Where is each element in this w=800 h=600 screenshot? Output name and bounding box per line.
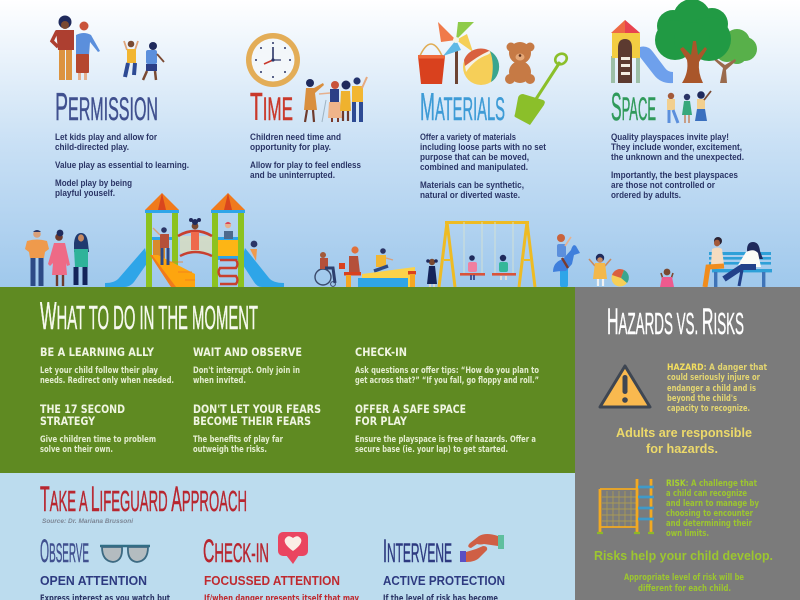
- text: permission body: Model play by being: [55, 178, 132, 188]
- panel: what to do in the moment: [40, 295, 539, 455]
- text: appropriate level of risk: Appropriate level of risk will be: [624, 573, 744, 583]
- text: risk definition: a child can recognize: [666, 489, 747, 499]
- heading: Check-in: CHECK-IN: [203, 533, 269, 569]
- text: materials body: [420, 132, 546, 200]
- tip: don't let your fears: [193, 402, 321, 455]
- text: permission body: [55, 132, 189, 198]
- heading: Take a Lifeguard Approach: TAKE A LIFEGUARD APPROACH: [40, 480, 247, 519]
- subheading: focussed attention: FOCUSSED ATTENTION: [204, 573, 340, 588]
- heading: Time: TIME: [250, 86, 293, 129]
- text: materials body: Materials can be synthetic,: [420, 180, 524, 190]
- column: intervene: [383, 533, 505, 600]
- tip: be a learning ally: Let your child follow their play: [40, 366, 158, 376]
- callout: adults are responsible: Adults are responsible: [616, 425, 752, 440]
- sky background: [0, 0, 800, 288]
- tip: the 17 second strategy: solve on their own.: [40, 445, 113, 455]
- tip: don't let your fears: outweigh the risks.: [193, 445, 267, 455]
- text: risk definition: [666, 479, 759, 539]
- heading: Materials: MATERIALS: [420, 86, 505, 129]
- column: observe: OBSERVE: [40, 533, 89, 569]
- text: risk definition: own limits.: [666, 529, 709, 539]
- icon: group of children: [304, 77, 367, 122]
- text: permission body: Let kids play and allow for: [55, 132, 158, 142]
- text: hazard definition: endanger a child and is: [667, 384, 756, 394]
- icon: climbing net: [597, 479, 654, 533]
- text: hazard definition: capacity to recognize.: [667, 404, 750, 414]
- illustration: girl by swing: [426, 259, 438, 287]
- icon: hands: [460, 534, 504, 562]
- callout: adults are responsible: for hazards.: [646, 441, 718, 456]
- text: appropriate level of risk: different for each child.: [638, 584, 731, 594]
- tip: be a learning ally: [40, 345, 174, 386]
- tip: don't let your fears: BECOME THEIR FEARS: [193, 414, 311, 428]
- illustration: adults on bench: [702, 237, 772, 289]
- text: hazard definition: [667, 363, 767, 414]
- icon: shovel: [514, 52, 569, 125]
- text: appropriate level of risk: [624, 573, 744, 594]
- illustration: three adults: [25, 230, 89, 286]
- text: materials body: natural or diverted waste.: [420, 190, 520, 200]
- heading: Permission: PERMISSION: [55, 86, 158, 129]
- tip: offer a safe space: FOR PLAY: [355, 414, 407, 428]
- tip: offer a safe space: secure base (ie. your lap) to get started.: [355, 445, 508, 455]
- text: hazard definition: HAZARD: A danger that: [667, 363, 767, 373]
- illustration: wheelchair user, adult and sandbox: [315, 246, 416, 287]
- tip: wait and observe: [193, 345, 302, 386]
- text: risk definition: and learn to manage by: [666, 499, 759, 509]
- text: materials body: including loose parts with no set: [420, 142, 546, 152]
- column: intervene: INTERVENE: [383, 533, 452, 569]
- panel: permission: [52, 16, 189, 198]
- illustration: toddler with ball: [589, 254, 629, 286]
- text: space body: Importantly, the best playspaces: [611, 170, 738, 180]
- tip: the 17 second strategy: Give children time to problem: [40, 435, 156, 445]
- panel: time: [246, 33, 367, 180]
- text: space body: They include wonder, excitement,: [611, 142, 742, 152]
- text: time body: and be uninterrupted.: [250, 170, 335, 180]
- text: risk definition: choosing to encounter: [666, 509, 754, 519]
- panel: space: [611, 0, 757, 200]
- subheading: open attention: OPEN ATTENTION: [40, 573, 147, 588]
- callout: adults are responsible: [616, 425, 752, 456]
- panel: materials: [418, 22, 569, 200]
- text: hazard definition: could seriously injure or: [667, 373, 761, 383]
- tip: offer a safe space: [355, 402, 536, 455]
- icon: heart speech bubble: [278, 532, 308, 564]
- panel: lifeguard approach: [0, 473, 575, 600]
- tip: the 17 second strategy: THE 17 SECOND: [40, 402, 125, 416]
- tip: the 17 second strategy: [40, 402, 156, 455]
- column: observe: [40, 533, 170, 600]
- icon: play tower with slide: [611, 20, 673, 83]
- icon: beach ball: [463, 48, 499, 85]
- panel: what to do in the moment: WHAT TO DO IN THE MOMENT: [40, 295, 258, 338]
- tip: wait and observe: Don't interrupt. Only join in: [193, 366, 300, 376]
- text: permission body: child-directed play.: [55, 142, 129, 152]
- text: risk definition: RISK: A challenge that: [666, 479, 757, 489]
- illustration: swing set: [439, 221, 535, 287]
- tip: wait and observe: when invited.: [193, 376, 246, 386]
- text: time body: opportunity for play.: [250, 142, 331, 152]
- text: materials body: Offer a variety of materials: [420, 132, 516, 142]
- text: time body: [250, 132, 361, 180]
- icon: trees: [655, 0, 757, 83]
- text: materials body: purpose that can be moved,: [420, 152, 529, 162]
- text: space body: Quality playspaces invite play!: [611, 132, 729, 142]
- icon: teddy bear: [505, 42, 535, 84]
- ground: grass: [0, 287, 575, 473]
- tip: be a learning ally: BE A LEARNING ALLY: [40, 345, 155, 359]
- illustration: baby: [660, 269, 674, 287]
- icon: bucket: [418, 44, 445, 84]
- text: materials body: combined and manipulated.: [420, 162, 528, 172]
- icon: clock: [246, 33, 300, 87]
- text: space body: ordered by adults.: [611, 190, 681, 200]
- tip: the 17 second strategy: STRATEGY: [40, 414, 95, 428]
- panel: space: SPACE: [611, 86, 656, 129]
- tip: wait and observe: WAIT AND OBSERVE: [193, 345, 302, 359]
- tip: check-in: CHECK-IN: [355, 345, 407, 359]
- source note: Source: Dr. Mariana Brussoni: [42, 518, 133, 525]
- text: space body: [611, 132, 744, 200]
- icon: pinwheel: [438, 22, 474, 84]
- text: risk definition: and determining their: [666, 519, 753, 529]
- icon: glasses: [100, 546, 150, 562]
- heading: Hazards vs. Risks: HAZARDS VS. RISKS: [607, 301, 744, 342]
- tip: check-in: get across that?” “If you fall, go floppy and roll.”: [355, 376, 539, 386]
- tip: offer a safe space: Ensure the playspace is free of hazards. Offer a: [355, 435, 536, 445]
- tip: check-in: Ask questions or offer tips: “How do you plan to: [355, 366, 539, 376]
- icon: warning triangle: [600, 366, 650, 407]
- text: space body: the unknown and the unexpected.: [611, 152, 744, 162]
- callout: risks help your child develop: Risks help your child develop.: [594, 548, 773, 563]
- text: permission body: playful youself.: [55, 188, 115, 198]
- tip: be a learning ally: needs. Redirect only when needed.: [40, 376, 174, 386]
- panel: hazards vs risks: [575, 287, 800, 600]
- tip: offer a safe space: OFFER A SAFE SPACE: [355, 402, 466, 416]
- text: space body: are those not controlled or: [611, 180, 716, 190]
- tip: don't let your fears: The benefits of play far: [193, 435, 284, 445]
- text: hazard definition: beyond the child's: [667, 394, 737, 404]
- tip: don't let your fears: DON'T LET YOUR FEARS: [193, 402, 321, 416]
- text: permission body: Value play as essential to learning.: [55, 160, 189, 170]
- subheading: active protection: ACTIVE PROTECTION: [383, 573, 505, 588]
- text: time body: Allow for play to feel endless: [250, 160, 361, 170]
- column: check-in: [203, 532, 359, 600]
- icon: three children: [667, 91, 711, 123]
- illustration: child on spring horse: [553, 234, 580, 288]
- text: time body: Children need time and: [250, 132, 341, 142]
- tip: check-in: [355, 345, 539, 386]
- icon: adults and children: [52, 16, 164, 80]
- illustration: play structure: [105, 193, 284, 287]
